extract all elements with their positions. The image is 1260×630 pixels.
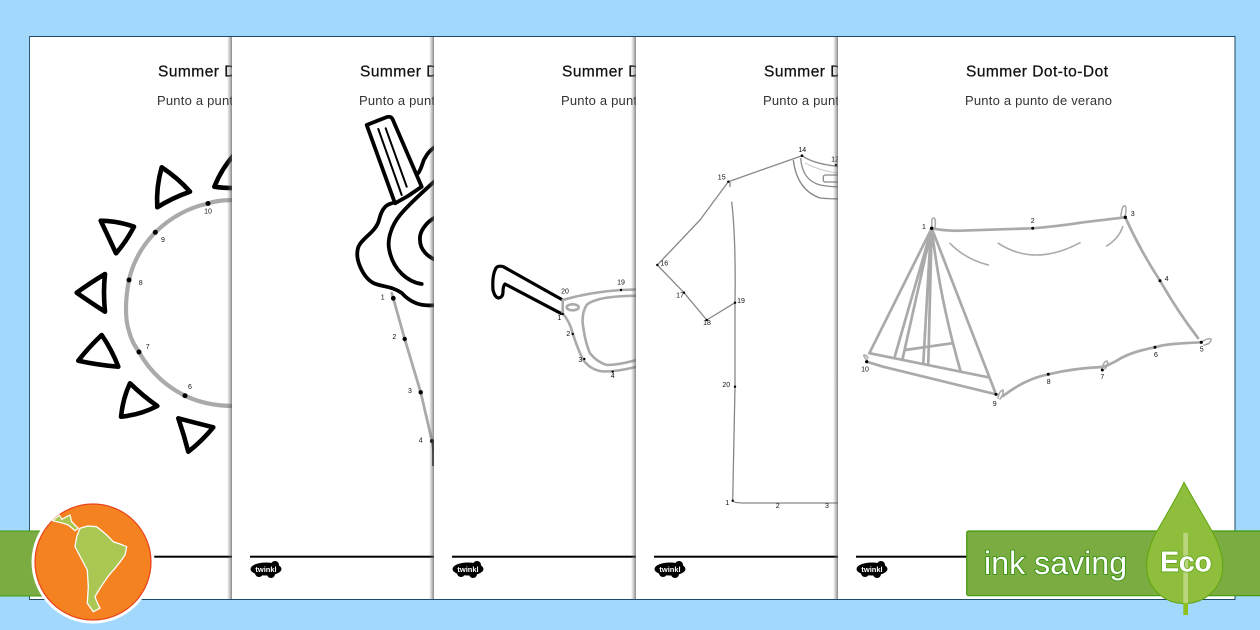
guitar strap dots: 4 <box>419 438 423 444</box>
sun outline dots: 6 <box>188 384 192 391</box>
sun outline dots: 10 <box>204 208 212 216</box>
twinkl logo <box>250 561 282 578</box>
twinkl logo <box>654 561 686 578</box>
panel: worksheet 4 t-shirt <box>636 37 1032 599</box>
page shadow <box>833 37 838 599</box>
tent drawing: 5 <box>1200 346 1204 354</box>
footer rule <box>452 556 642 558</box>
footer rule <box>250 556 440 558</box>
sunglasses frame: 2 <box>566 331 570 338</box>
twinkl logo: twinkl <box>861 565 883 574</box>
sunglasses frame: 3 <box>578 357 582 364</box>
sunglasses frame: 4 <box>611 373 615 380</box>
ink saving banner <box>967 531 1260 596</box>
footer rule <box>856 556 986 558</box>
subtitle: worksheet 4: Punto a punto de verano <box>763 93 910 108</box>
twinkl logo: twinkl <box>659 565 681 574</box>
t-shirt drawing: 20 <box>722 382 730 389</box>
ink saving text: ink saving <box>984 545 1127 581</box>
sun outline dots <box>126 200 234 406</box>
t-shirt drawing: 14 <box>798 147 806 154</box>
t-shirt drawing: 3 <box>825 503 829 510</box>
tent drawing: 9 <box>993 401 997 408</box>
guitar strap dots: 1 <box>381 294 385 302</box>
page shadow <box>227 37 232 599</box>
panel: worksheet 1 sun <box>30 37 426 599</box>
sunglasses frame: 1 <box>557 315 561 322</box>
central america <box>53 515 78 531</box>
green banner left <box>0 531 50 596</box>
tent drawing: 6 <box>1154 352 1158 359</box>
t-shirt drawing: 1 <box>725 500 729 507</box>
twinkl logo: twinkl <box>457 565 479 574</box>
tent drawing: 4 <box>1165 276 1169 283</box>
t-shirt drawing: 16 <box>660 260 668 268</box>
panel: worksheet 2 guitar <box>232 37 628 599</box>
twinkl logo <box>856 561 888 578</box>
footer rule <box>654 556 844 558</box>
t-shirt drawing: 12 <box>831 156 839 164</box>
guitar drawing <box>357 117 436 305</box>
title: worksheet 4: Summer Dot-to-Dot <box>764 64 907 80</box>
footer rule <box>48 556 238 558</box>
eco text: Eco <box>1160 547 1212 579</box>
sun rays <box>77 155 234 452</box>
tent drawing: 7 <box>1100 374 1104 381</box>
twinkl logo: twinkl <box>255 565 277 574</box>
page shadow <box>631 37 636 599</box>
subtitle: worksheet 2: Punto a punto de verano <box>359 93 506 108</box>
guitar strap dots: 3 <box>408 388 412 395</box>
sun outline dots: 9 <box>161 237 165 244</box>
twinkl logo <box>452 561 484 578</box>
title: worksheet 3: Summer Dot-to-Dot <box>562 64 705 80</box>
subtitle: worksheet 1: Punto a punto de verano <box>157 93 304 108</box>
panel: worksheet 3 sunglasses <box>434 37 830 599</box>
sun outline dots: 8 <box>139 280 143 287</box>
icon: eco leaf <box>1147 482 1223 615</box>
tent drawing: 3 <box>1131 211 1135 218</box>
subtitle: worksheet 5: Punto a punto de verano <box>965 93 1112 108</box>
t-shirt drawing: 17 <box>676 292 684 300</box>
tent drawing: 1 <box>922 224 926 231</box>
page shadow <box>429 37 434 599</box>
sunglasses arm <box>493 266 563 313</box>
sunglasses frame <box>557 280 640 380</box>
tent drawing: 10 <box>861 366 869 374</box>
title: worksheet 1: Summer Dot-to-Dot <box>158 64 301 80</box>
sunglasses frame: 19 <box>617 280 625 286</box>
title: worksheet 5: Summer Dot-to-Dot <box>966 64 1109 80</box>
sun outline dots: 7 <box>146 344 150 351</box>
t-shirt drawing: 19 <box>737 298 745 305</box>
subtitle: worksheet 3: Punto a punto de verano <box>561 93 708 108</box>
tent drawing: 8 <box>1047 379 1051 386</box>
panel: worksheet 5 tent <box>838 37 1234 599</box>
sunglasses frame: 20 <box>561 288 569 296</box>
south america <box>75 526 127 612</box>
t-shirt drawing: 18 <box>703 320 711 327</box>
t-shirt drawing <box>656 147 853 510</box>
tent drawing <box>861 206 1211 408</box>
icon: South America badge <box>32 500 154 624</box>
guitar strap dots: 2 <box>392 334 396 341</box>
guitar strap dots <box>381 293 436 466</box>
title: worksheet 2: Summer Dot-to-Dot <box>360 64 503 80</box>
tent drawing: 2 <box>1031 218 1035 225</box>
t-shirt drawing: 15 <box>718 174 726 182</box>
t-shirt drawing: 2 <box>776 503 780 510</box>
